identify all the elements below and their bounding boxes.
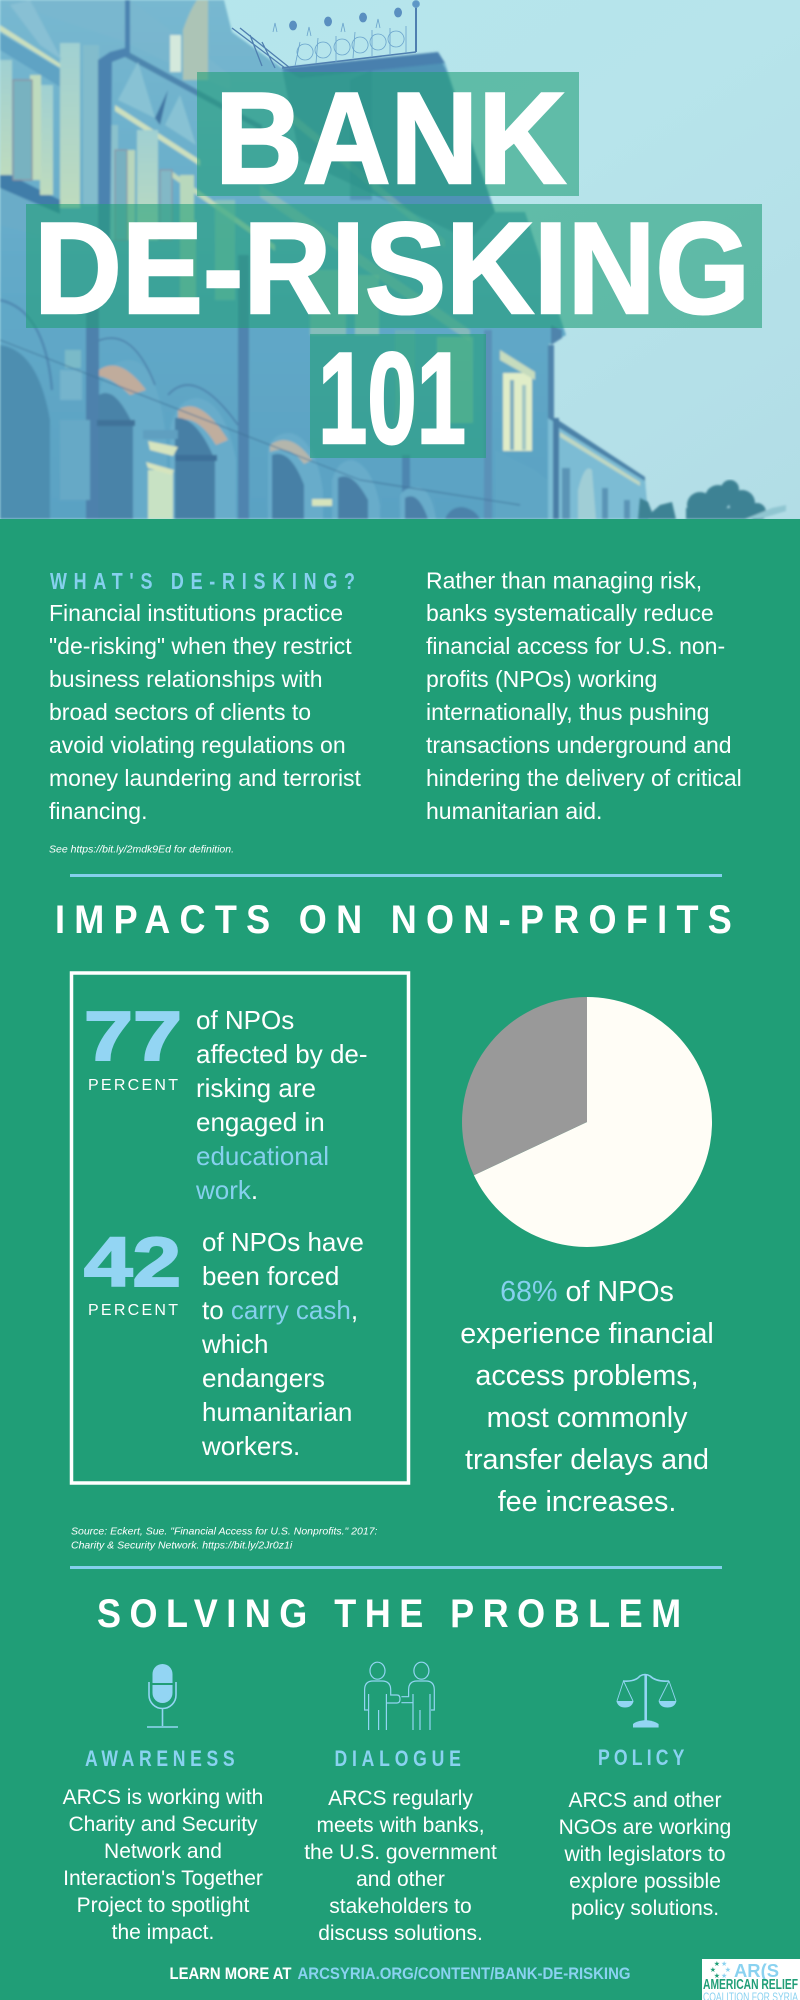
- logo stars: ★: [710, 1966, 716, 1974]
- text block: pie caption: access problems,: [475, 1360, 699, 1392]
- percent label: PERCENT: [88, 1077, 178, 1094]
- icon: microphone: [147, 1664, 178, 1727]
- text block: definition: business relationships with: [49, 666, 323, 692]
- text block: consequence: humanitarian aid.: [426, 798, 602, 824]
- text block: pie caption: experience financial: [460, 1318, 714, 1350]
- logo wordmark: AR(S: [734, 1961, 779, 1981]
- icon: scales of justice: [616, 1674, 676, 1728]
- text block: awareness: ARCS is working with: [63, 1786, 263, 1809]
- percent label: PERCENT: [88, 1302, 178, 1319]
- text block: awareness: Interaction's Together: [63, 1867, 263, 1890]
- building facade: [0, 0, 648, 519]
- logo stars: ★: [714, 1960, 720, 1968]
- description: carry cash,: [231, 1295, 358, 1325]
- panel: statistics box: [72, 973, 408, 1483]
- text block: awareness: the impact.: [112, 1921, 214, 1944]
- heading: dialogue: DIALOGUE: [334, 1747, 461, 1772]
- title word: BANK: BANK: [215, 65, 566, 211]
- sky: [0, 0, 800, 519]
- text block: awareness: Charity and Security: [68, 1813, 258, 1836]
- footnote: definition source: See https://bit.ly/2mdk9Ed for definition.: [49, 844, 234, 856]
- column: dialogue: [304, 1662, 497, 1945]
- icon: two people shaking hands: [365, 1662, 434, 1730]
- logo stars: ★: [714, 1972, 720, 1980]
- description: risking are: [196, 1073, 316, 1103]
- description: of NPOs have: [202, 1227, 364, 1257]
- title band: BANK: [197, 72, 579, 196]
- rooftop railing: [232, 0, 420, 68]
- footer: learn more link: [170, 1964, 630, 1983]
- logo stars: ★: [721, 1972, 727, 1980]
- text block: consequence: transactions underground and: [426, 732, 732, 758]
- text block: policy: explore possible: [569, 1870, 721, 1893]
- text block: policy: NGOs are working: [559, 1816, 731, 1839]
- heading: what's de-risking: WHAT'S DE-RISKING?: [50, 569, 355, 595]
- text block: consequence: hindering the delivery of critical: [426, 765, 742, 791]
- text block: policy: ARCS and other: [569, 1789, 721, 1812]
- text block: policy: with legislators to: [563, 1843, 726, 1866]
- text block: consequence: financial access for U.S. non-: [426, 633, 725, 659]
- footnote: source: Source: Eckert, Sue. "Financial Access for U.S. Nonprofits." 2017:: [71, 1526, 378, 1538]
- description: engaged in: [196, 1107, 325, 1137]
- text block: dialogue: the U.S. government: [304, 1841, 497, 1864]
- number 42: 42: [84, 1223, 181, 1301]
- description: work: [195, 1175, 252, 1205]
- description: workers.: [201, 1431, 300, 1461]
- text block: consequence: internationally, thus pushing: [426, 699, 709, 725]
- heading: solving the problem: SOLVING THE PROBLEM: [97, 1592, 681, 1636]
- pie chart: 68 percent: [462, 997, 712, 1247]
- logo stars: [710, 1961, 730, 1978]
- learn more label: LEARN MORE AT: [170, 1964, 292, 1983]
- number 77: 77: [84, 997, 182, 1075]
- text block: definition: "de-risking" when they restrict: [49, 633, 352, 659]
- hero photo: bank building: [0, 0, 800, 521]
- text block: dialogue: discuss solutions.: [318, 1922, 483, 1945]
- text block: definition: broad sectors of clients to: [49, 699, 311, 725]
- description: endangers: [202, 1363, 325, 1393]
- title band: DE-RISKING: [26, 204, 762, 328]
- text block: definition: Financial institutions practice: [49, 600, 343, 626]
- text block: definition: financing.: [49, 798, 147, 824]
- description: which: [201, 1329, 268, 1359]
- column: awareness: [63, 1664, 263, 1944]
- text block: dialogue: meets with banks,: [316, 1814, 485, 1837]
- text block: pie caption: transfer delays and: [465, 1444, 709, 1476]
- text block: dialogue: and other: [356, 1868, 445, 1891]
- logo stars: ★: [721, 1960, 727, 1968]
- box outline: [72, 973, 408, 1483]
- stat: 77 percent: [84, 997, 368, 1205]
- stat: 42 percent: [84, 1223, 364, 1461]
- logo stars: ★: [725, 1966, 731, 1974]
- title block: [26, 65, 762, 471]
- footnote: source: Charity & Security Network. https://bit.ly/2Jr0z1i: [71, 1540, 293, 1552]
- trees and lamp: [638, 480, 786, 521]
- text block: policy: policy solutions.: [571, 1897, 719, 1920]
- text block: pie caption: fee increases.: [498, 1486, 676, 1518]
- description: educational: [196, 1141, 329, 1171]
- logo background: [702, 1959, 800, 2000]
- panel: what's de-risking: [49, 568, 742, 856]
- text block: pie caption: most commonly: [487, 1402, 688, 1434]
- url: ARCSYRIA.ORG/CONTENT/BANK-DE-RISKING: [298, 1964, 630, 1983]
- text block: definition: money laundering and terrorist: [49, 765, 362, 791]
- text block: consequence: banks systematically reduce: [426, 600, 714, 626]
- pie slice: remainder: [462, 997, 587, 1175]
- text block: pie caption: 68% of NPOs: [500, 1276, 674, 1308]
- heading: impacts on non-profits: IMPACTS ON NON-PROFITS: [55, 898, 732, 942]
- column: policy: [559, 1674, 731, 1920]
- text block: awareness: Project to spotlight: [77, 1894, 250, 1917]
- pie slice: 68%: [474, 997, 712, 1247]
- title band: 101: [310, 334, 486, 458]
- description: of NPOs: [196, 1005, 294, 1035]
- text block: consequence: Rather than managing risk,: [426, 568, 702, 594]
- text block: awareness: Network and: [104, 1840, 222, 1863]
- logo: ARCS: [702, 1959, 800, 2000]
- text block: dialogue: ARCS regularly: [328, 1787, 473, 1810]
- heading: awareness: AWARENESS: [85, 1747, 235, 1772]
- description: .: [251, 1175, 258, 1205]
- title word: DE-RISKING: DE-RISKING: [34, 195, 750, 341]
- description: humanitarian: [202, 1397, 352, 1427]
- text block: consequence: profits (NPOs) working: [426, 666, 657, 692]
- description: affected by de-: [196, 1039, 368, 1069]
- description: to: [202, 1295, 231, 1325]
- text block: definition: avoid violating regulations on: [49, 732, 346, 758]
- heading: policy: POLICY: [598, 1746, 684, 1771]
- title word: 101: 101: [318, 325, 466, 471]
- description: been forced: [202, 1261, 339, 1291]
- text block: dialogue: stakeholders to: [329, 1895, 472, 1918]
